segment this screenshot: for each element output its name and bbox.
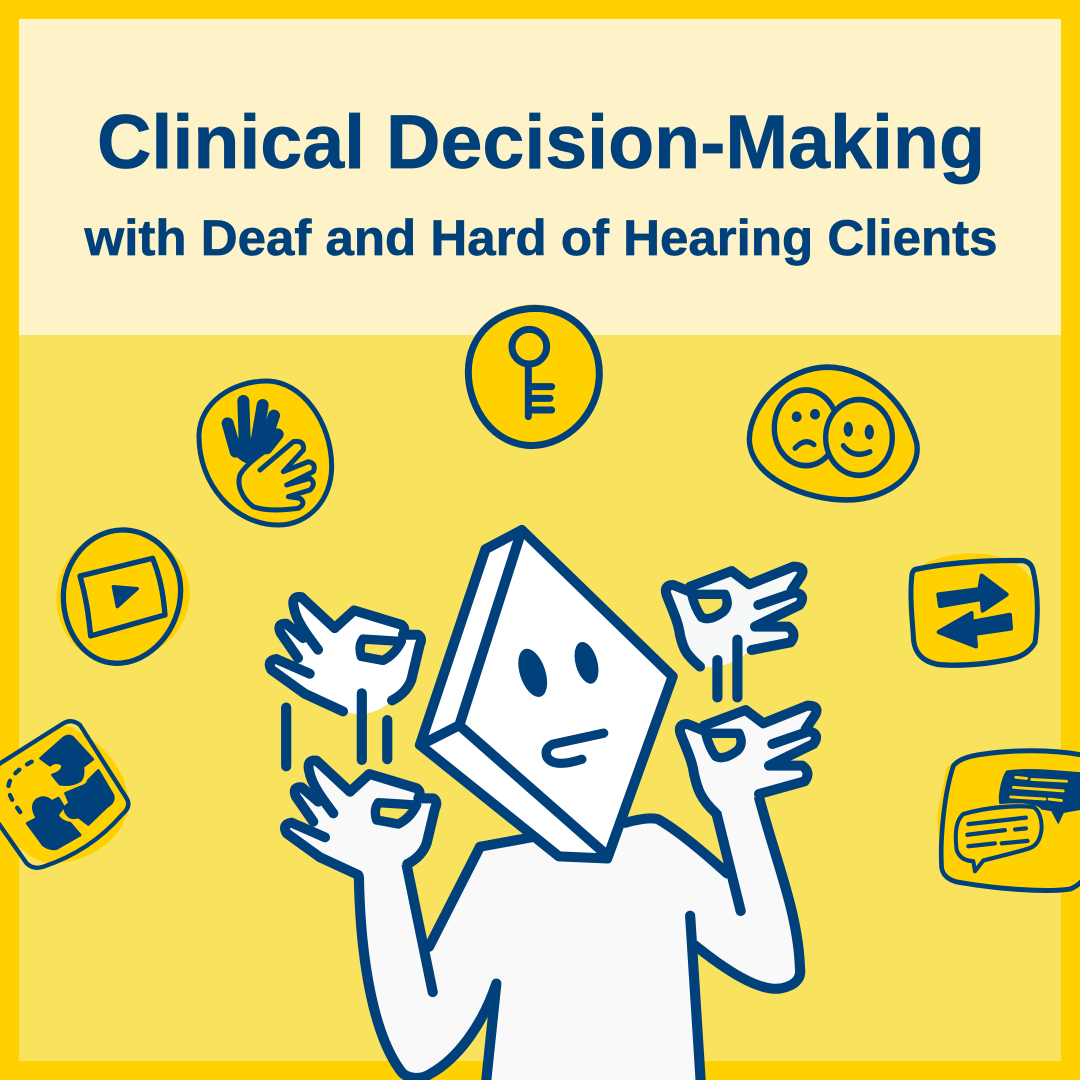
- icon: key: [467, 304, 599, 447]
- icon: puzzle pieces: [0, 721, 128, 868]
- eyes: [513, 639, 603, 700]
- hand: lower left: [285, 761, 436, 875]
- motion lines: [286, 640, 737, 766]
- icon: chat bubbles: [937, 750, 1080, 890]
- title: Clinical Decision-Making: [97, 100, 985, 185]
- hand: upper right: [666, 567, 803, 667]
- hand: lower right: [680, 706, 817, 813]
- icon: video player: [57, 528, 190, 663]
- lower yellow panel: [19, 335, 1061, 1061]
- subtitle: with Deaf and Hard of Hearing Clients: [83, 210, 998, 266]
- mouth: [546, 733, 604, 763]
- hand: upper left: [270, 597, 421, 714]
- header panel: [19, 19, 1061, 335]
- icon: signing hands: [196, 380, 332, 527]
- icon: exchange arrows: [908, 553, 1038, 665]
- head: book: [420, 530, 673, 859]
- figure: person with book head signing: [270, 530, 817, 1080]
- body: [359, 795, 800, 1080]
- icon: sad and happy faces: [749, 367, 917, 500]
